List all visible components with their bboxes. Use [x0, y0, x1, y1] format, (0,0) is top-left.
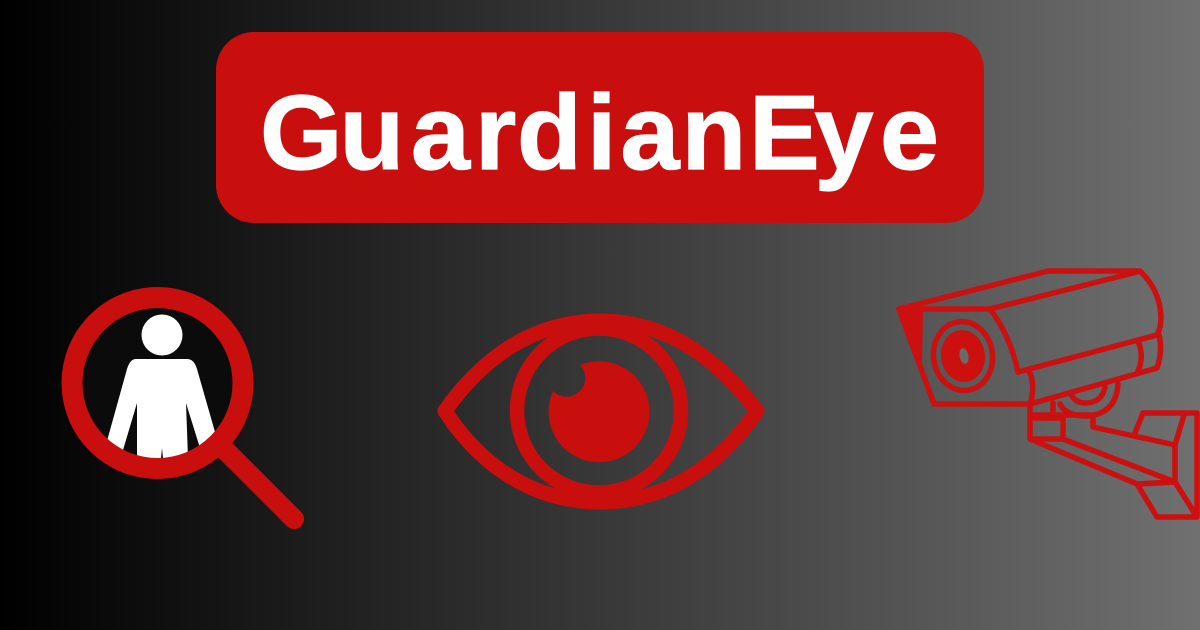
icon: security camera: [897, 271, 1197, 517]
ball joint: [1060, 384, 1118, 416]
icon: magnifying glass with person: [72, 298, 294, 519]
title text: GuardianEye: [260, 74, 939, 192]
lens: [929, 318, 997, 394]
camera front: [899, 309, 1033, 404]
lens ring: [72, 298, 243, 468]
arm: [1030, 403, 1175, 482]
wall mount: [1135, 413, 1197, 517]
handle: [224, 449, 294, 519]
sun shield: [1030, 335, 1161, 404]
pupil: [549, 361, 650, 462]
person: [107, 314, 215, 458]
camera body: [899, 271, 1161, 372]
title banner: [216, 32, 984, 223]
icon: eye: [445, 321, 757, 502]
